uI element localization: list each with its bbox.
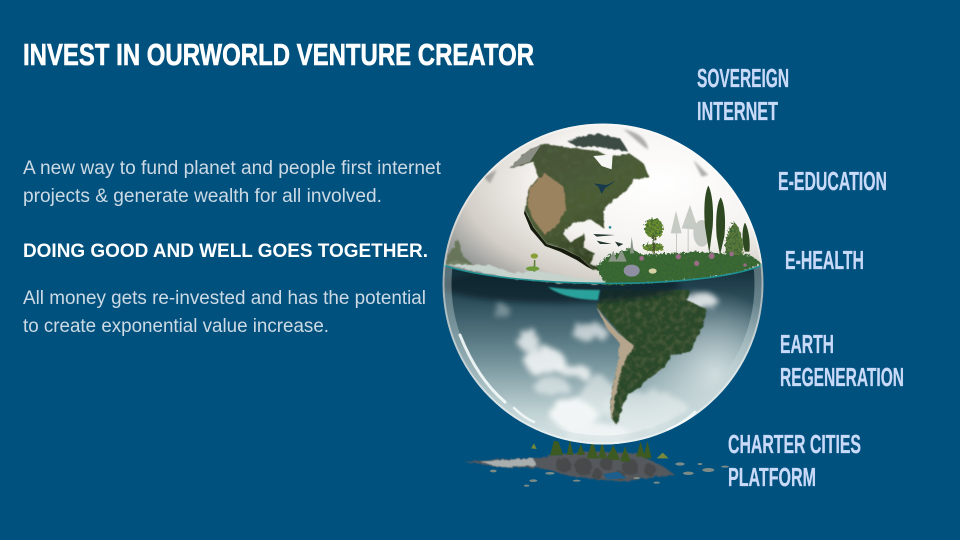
teal water wedge	[548, 287, 600, 300]
text block: intro	[23, 158, 442, 207]
dark water shadow near surface	[440, 267, 680, 303]
label: E-Education: E-EDUCATION	[778, 168, 887, 196]
polar ice shadows	[483, 129, 708, 183]
lower water body	[442, 265, 764, 444]
text block: bold statement: DOING GOOD AND WELL GOES TOGETHER.	[23, 241, 428, 262]
label: Charter Cities Platform: CHARTER CITIES	[728, 431, 861, 459]
text block: intro: A new way to fund planet and people first internet	[23, 158, 442, 179]
text block: reinvestment	[23, 288, 426, 337]
label: E-Health: E-HEALTH	[785, 247, 864, 275]
label: Sovereign Internet	[697, 65, 789, 126]
label: Earth Regeneration: EARTH	[780, 331, 834, 359]
upper hemisphere	[440, 120, 770, 295]
title: INVEST IN OURWORLD VENTURE CREATOR	[23, 37, 534, 72]
floating island	[465, 440, 729, 487]
left shore frost and grass	[446, 260, 605, 284]
label: Sovereign Internet: INTERNET	[697, 98, 778, 126]
text block: reinvestment: to create exponential value increase.	[23, 316, 329, 337]
slide	[23, 44, 903, 487]
foreground meadow	[597, 248, 762, 285]
label: Earth Regeneration	[780, 331, 904, 392]
clouds	[493, 294, 718, 443]
South America	[597, 290, 707, 425]
label: Sovereign Internet: SOVEREIGN	[697, 65, 789, 93]
sphere	[442, 124, 764, 444]
right side brightness	[650, 294, 759, 423]
glass rim	[442, 266, 764, 442]
teal water rim	[443, 265, 763, 283]
North America	[510, 133, 649, 270]
vegetation	[446, 186, 762, 285]
text block: reinvestment: All money gets re-invested and has the potential	[23, 288, 426, 309]
background misty trees	[671, 205, 710, 253]
label: Charter Cities Platform	[728, 431, 861, 492]
tall cypress trees	[704, 186, 750, 255]
small green trees	[643, 218, 664, 253]
text block: intro: projects & generate wealth for all involved.	[23, 186, 382, 207]
glass reflections	[460, 335, 695, 430]
globe illustration	[440, 120, 790, 487]
label: Charter Cities Platform: PLATFORM	[728, 464, 816, 492]
sphere rim highlight	[444, 124, 762, 444]
